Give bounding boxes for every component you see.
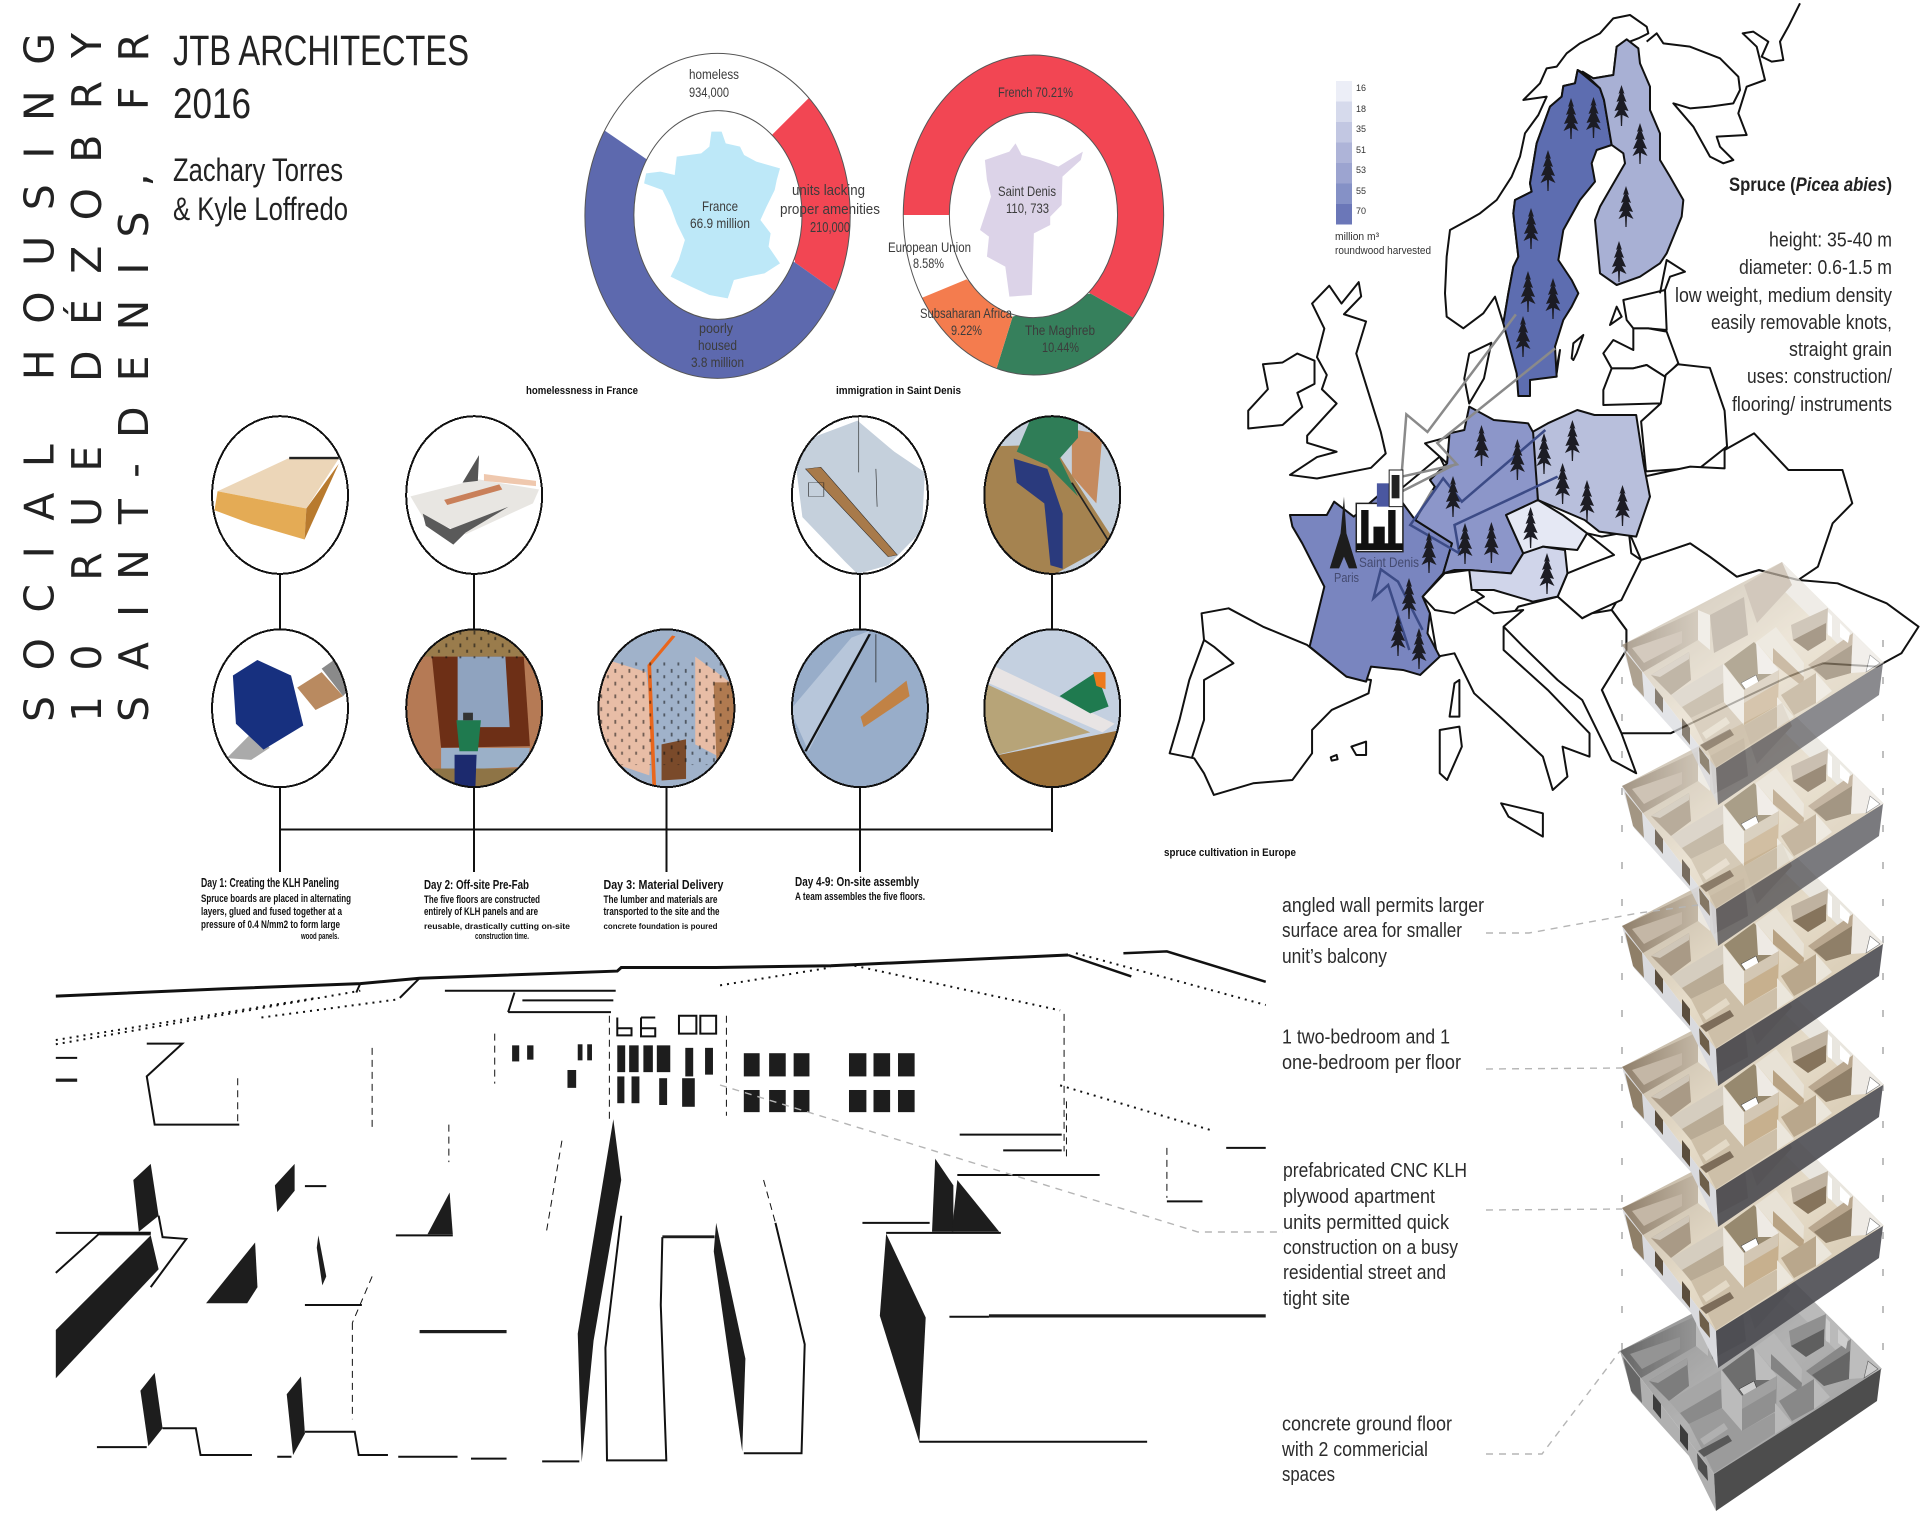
- callout: bedrooms: 1 two-bedroom and 1: [1282, 1026, 1450, 1048]
- map caption: spruce cultivation in Europe: [1164, 847, 1296, 859]
- callout: angled wall: angled wall permits larger: [1282, 895, 1484, 917]
- map place labels: [1334, 554, 1419, 585]
- roof lines: [56, 951, 1266, 1130]
- concrete ground floor: [1620, 1268, 1882, 1511]
- spruce description: easily removable knots,: [1711, 312, 1892, 334]
- donut chart: homelessness in France: housed: [698, 337, 737, 353]
- step: worker close-up: [986, 417, 1119, 573]
- donut chart: homelessness in France: [584, 52, 880, 379]
- callout: angled wall: unit’s balcony: [1282, 946, 1387, 968]
- architect, year and authors: Zachary Torres: [173, 152, 343, 188]
- callout leader lines: [720, 905, 1698, 1454]
- donut chart: immigration in Saint Denis: 10.44%: [1042, 339, 1079, 355]
- callout: prefabricated units: tight site: [1283, 1288, 1350, 1310]
- day 2 text: construction time.: [475, 931, 529, 941]
- timber floor 2: [1622, 843, 1884, 1086]
- callout: bedrooms: one-bedroom per floor: [1282, 1052, 1461, 1074]
- timber floor 3: [1622, 984, 1884, 1227]
- donut chart: immigration in Saint Denis: 9.22%: [951, 322, 982, 338]
- map legend: [1335, 81, 1431, 257]
- timber floor 1: [1622, 703, 1884, 946]
- step: KLH panel: [214, 457, 339, 539]
- map legend: 18: [1356, 104, 1366, 114]
- timber floor 4: [1622, 1125, 1884, 1368]
- icon: Eiffel Tower: [1330, 497, 1357, 568]
- donut chart: immigration in Saint Denis: [888, 54, 1164, 376]
- day 3 text: The lumber and materials are: [604, 894, 718, 906]
- British Isles, Denmark and Belarus: [1248, 282, 1727, 479]
- day 3 text: transported to the site and the: [604, 906, 720, 918]
- day 4-9 text: A team assembles the five floors.: [795, 891, 925, 903]
- donut chart: homelessness in France: 66.9 million: [690, 215, 750, 231]
- day 1 text: Day 1: Creating the KLH Paneling: [201, 876, 339, 890]
- site perspective drawing: [56, 951, 1266, 1462]
- callout: prefabricated units: [1283, 1160, 1467, 1310]
- guide lines: [1622, 640, 1883, 1350]
- donut chart: homelessness in France: units lacking: [792, 182, 865, 199]
- day 1 text: [201, 876, 351, 941]
- day 2 text: The five floors are constructed: [424, 894, 540, 906]
- day 1 text: layers, glued and fused together at a: [201, 906, 343, 918]
- map legend: 70: [1356, 206, 1366, 216]
- donut chart: immigration in Saint Denis: Subsaharan Africa: [920, 305, 1012, 321]
- spruce description: diameter: 0.6-1.5 m: [1739, 257, 1892, 279]
- step: on-site lift: [790, 627, 931, 789]
- construction timeline connectors: [280, 574, 1052, 872]
- day 1 text: wood panels.: [300, 931, 339, 941]
- step: material delivery: [597, 627, 738, 789]
- exploded axonometric of building: [1620, 562, 1884, 1511]
- vertical title: SAINT-DENIS, FR: [110, 33, 158, 722]
- chart captions: [526, 385, 961, 397]
- map place labels: Paris: [1334, 570, 1359, 585]
- day 4-9 text: Day 4-9: On-site assembly: [795, 875, 919, 889]
- spruce description: low weight, medium density: [1675, 285, 1892, 307]
- donut chart: homelessness in France: 210,000: [810, 219, 850, 236]
- donut chart: immigration in Saint Denis: French 70.21%: [998, 84, 1073, 100]
- donut chart: immigration in Saint Denis: The Maghreb: [1025, 322, 1095, 338]
- spruce description: straight grain: [1789, 339, 1892, 361]
- vertical title: SOCIAL HOUSING: [16, 33, 64, 722]
- day 1 text: Spruce boards are placed in alternating: [201, 893, 351, 905]
- step: CNC table: [410, 455, 539, 545]
- map legend: 51: [1356, 145, 1366, 155]
- day 3 text: [604, 878, 724, 931]
- top timber floor: [1622, 562, 1884, 805]
- callout: angled wall: [1282, 895, 1484, 968]
- spruce description: uses: construction/: [1747, 366, 1892, 388]
- continental countries: [1170, 314, 1919, 837]
- building windows: [512, 1016, 915, 1112]
- day 2 text: [424, 878, 571, 941]
- spruce tree icons: [1390, 85, 1648, 669]
- day 3 text: concrete foundation is poured: [604, 922, 718, 931]
- day 2 text: reusable, drastically cutting on-site: [424, 922, 571, 931]
- Nordic and Baltic countries: [1445, 3, 1800, 405]
- callout: prefabricated units: units permitted quick: [1283, 1212, 1450, 1234]
- map of Europe: [1170, 3, 1919, 837]
- spruce description: [1675, 175, 1892, 416]
- donut chart: immigration in Saint Denis: 8.58%: [913, 255, 944, 271]
- day 3 text: Day 3: Material Delivery: [604, 878, 724, 892]
- chart captions: immigration in Saint Denis: [836, 385, 961, 397]
- vertical title: [16, 32, 158, 722]
- donut chart: homelessness in France: 3.8 million: [691, 354, 744, 370]
- callout: angled wall: surface area for smaller: [1282, 920, 1462, 942]
- step: panel assembly: [227, 660, 352, 760]
- map place labels: Saint Denis: [1359, 554, 1419, 570]
- map legend: million m³: [1335, 231, 1379, 243]
- callout: concrete ground floor: with 2 commericial: [1281, 1439, 1428, 1461]
- construction sequence illustrations: [212, 414, 1127, 789]
- map legend: 55: [1356, 186, 1366, 196]
- donut chart: immigration in Saint Denis: European Union: [888, 239, 971, 255]
- spruce description: Spruce (Picea abies): [1729, 175, 1892, 196]
- donut chart: homelessness in France: poorly: [699, 320, 733, 336]
- vertical title: 10 RUE DÉZOBRY: [63, 32, 111, 722]
- callout: concrete ground floor: spaces: [1282, 1464, 1335, 1486]
- circle outlines: [212, 416, 1120, 787]
- architect, year and authors: [173, 27, 469, 227]
- step: off-site framing: [404, 627, 545, 789]
- day 4-9 text: [795, 875, 925, 903]
- callout: prefabricated units: residential street and: [1283, 1262, 1446, 1284]
- day 1 text: pressure of 0.4 N/mm2 to form large: [201, 919, 340, 931]
- shadow masses: [56, 1079, 1266, 1462]
- architect, year and authors: 2016: [173, 80, 251, 128]
- callout: concrete ground floor: concrete ground floor: [1282, 1414, 1452, 1436]
- architect, year and authors: JTB ARCHITECTES: [173, 27, 469, 75]
- step: crane beam: [793, 417, 925, 574]
- spruce description: flooring/ instruments: [1732, 394, 1892, 416]
- step: on-site worker: [986, 630, 1119, 786]
- donut chart: homelessness in France: proper amenities: [780, 201, 880, 218]
- map legend: 16: [1356, 83, 1366, 93]
- donut chart: immigration in Saint Denis: 110, 733: [1006, 200, 1049, 216]
- donut chart: homelessness in France: France: [702, 198, 738, 214]
- chart captions: homelessness in France: [526, 385, 638, 397]
- outline lines: [56, 1014, 1266, 1461]
- architect, year and authors: & Kyle Loffredo: [173, 191, 348, 227]
- day 2 text: entirely of KLH panels and are: [424, 906, 538, 918]
- callout: concrete ground floor: [1281, 1414, 1452, 1486]
- spruce description: height: 35-40 m: [1769, 230, 1892, 252]
- icon: Saint-Denis basilica: [1356, 470, 1403, 552]
- day 2 text: Day 2: Off-site Pre-Fab: [424, 878, 529, 892]
- timber route arrows: [1373, 314, 1558, 650]
- callout: prefabricated units: construction on a busy: [1283, 1237, 1458, 1259]
- callout: bedrooms: [1282, 1026, 1461, 1074]
- callout: prefabricated units: prefabricated CNC KLH: [1283, 1160, 1467, 1182]
- donut chart: immigration in Saint Denis: Saint Denis: [998, 183, 1056, 199]
- map legend: 53: [1356, 165, 1366, 175]
- map legend: 35: [1356, 124, 1366, 134]
- donut chart: homelessness in France: 934,000: [689, 84, 729, 100]
- donut chart: homelessness in France: homeless: [689, 66, 739, 82]
- callout: prefabricated units: plywood apartment: [1283, 1186, 1435, 1208]
- map legend: roundwood harvested: [1335, 245, 1431, 257]
